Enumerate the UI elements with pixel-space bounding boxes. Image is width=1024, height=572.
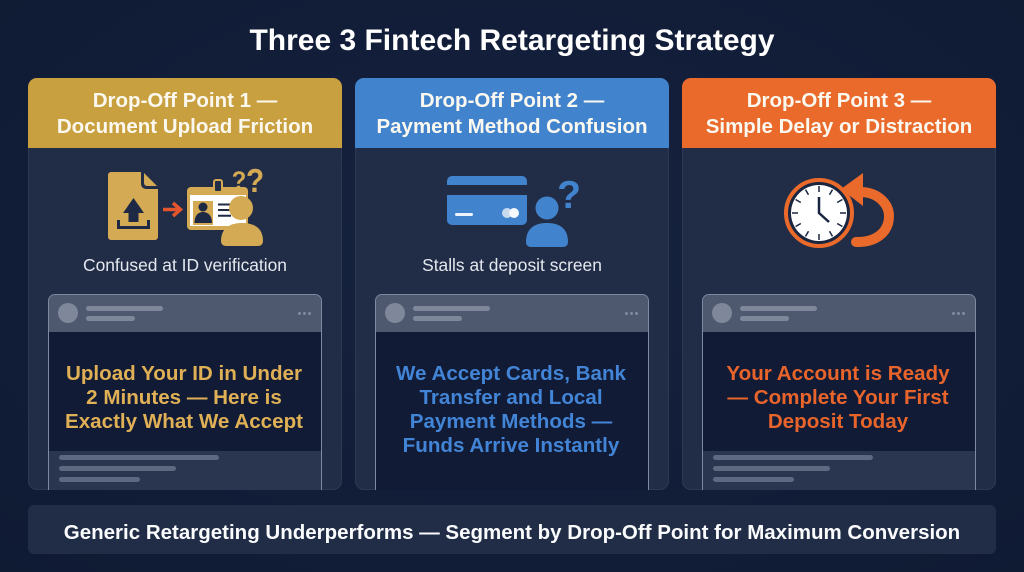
ad headline (376, 332, 648, 492)
ad headline: Transfer and Local (419, 386, 603, 409)
mock post header (376, 295, 648, 332)
ad headline: Payment Methods — (410, 410, 612, 433)
mock post header (703, 295, 975, 332)
title: Three 3 Fintech Retargeting Strategy (249, 24, 775, 57)
icon: payment card with confused person (447, 174, 581, 247)
ad mockup: payment methods (375, 294, 649, 490)
icon: payment card with confused person: ? (557, 174, 581, 217)
panel: drop-off point 2 (355, 78, 669, 490)
ad headline: Funds Arrive Instantly (403, 434, 619, 457)
ad headline: Upload Your ID in Under (66, 362, 302, 385)
ad headline: 2 Minutes — Here is (86, 386, 282, 409)
icon: document upload to confused ID check (108, 166, 264, 246)
header: drop-off point 3: Drop-Off Point 3 — (747, 89, 931, 112)
header: drop-off point 1 (28, 78, 342, 148)
ad mockup: document upload (48, 294, 322, 490)
mock post header (49, 295, 321, 332)
header: drop-off point 3: Simple Delay or Distraction (706, 115, 972, 138)
ad headline: Exactly What We Accept (65, 410, 303, 433)
footer takeaway: Generic Retargeting Underperforms — Segment by Drop-Off Point for Maximum Conversion (64, 521, 960, 544)
panel: drop-off point 1 (28, 78, 342, 490)
ad headline (49, 332, 321, 451)
icon: document upload to confused ID check: ? (232, 167, 246, 195)
header: drop-off point 2: Drop-Off Point 2 — (420, 89, 604, 112)
header: drop-off point 1: Document Upload Friction (57, 115, 313, 138)
header: drop-off point 3 (682, 78, 996, 148)
header: drop-off point 1: Drop-Off Point 1 — (93, 89, 277, 112)
ad mockup: complete first deposit (702, 294, 976, 490)
ad headline: We Accept Cards, Bank (396, 362, 626, 385)
footer takeaway (28, 505, 996, 554)
caption: confused at ID verification: Confused at ID verification (83, 255, 287, 275)
header: drop-off point 2: Payment Method Confusion (376, 115, 648, 138)
ad headline: Deposit Today (768, 410, 908, 433)
ad headline: — Complete Your First (727, 386, 949, 409)
icon: clock with return arrow (784, 173, 894, 248)
header: drop-off point 2 (355, 78, 669, 148)
panel: drop-off point 3 (682, 78, 996, 490)
caption: stalls at deposit screen: Stalls at deposit screen (422, 255, 602, 275)
ad headline: Your Account is Ready (726, 362, 950, 385)
ad headline (703, 332, 975, 451)
